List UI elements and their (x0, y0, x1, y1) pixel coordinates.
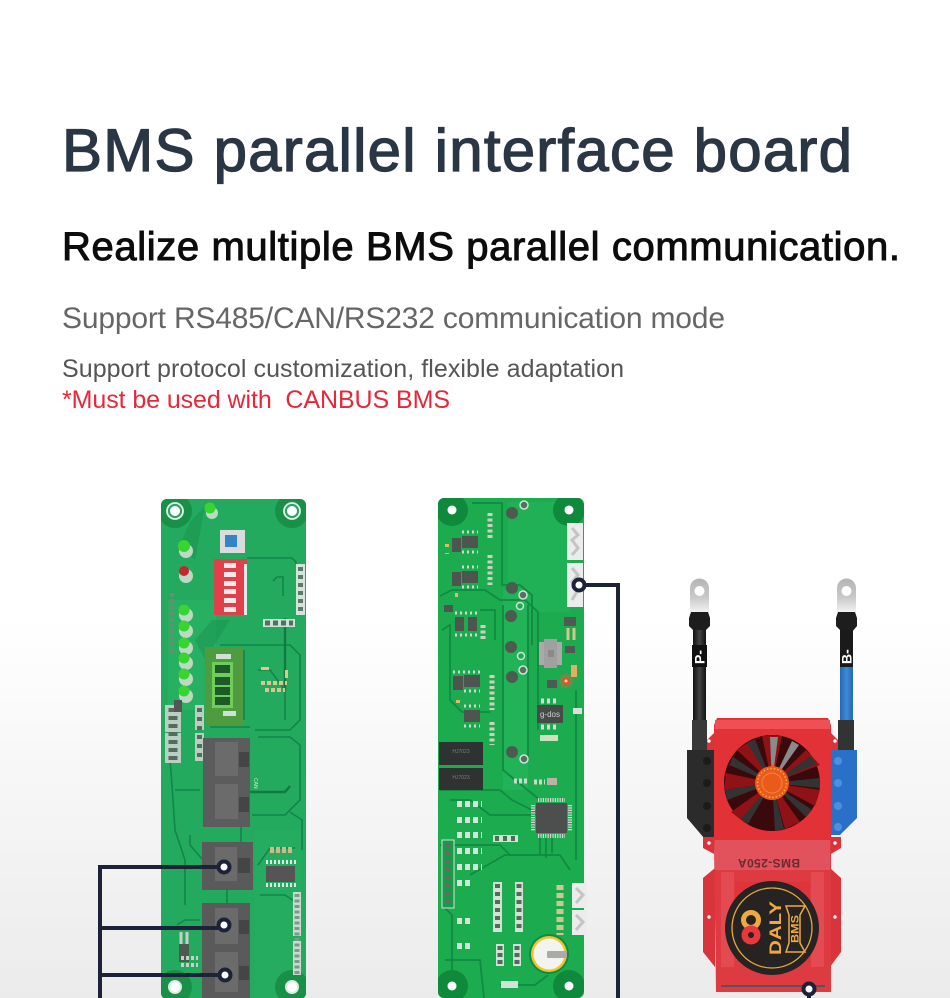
SOIC chip (266, 850, 296, 885)
power MOSFET chip: g-dos (540, 710, 560, 719)
microcontroller chip (512, 778, 570, 836)
DALY logo badge: DALY (766, 900, 785, 955)
connector nodes on RJ45 ports (218, 862, 230, 980)
traces (170, 558, 302, 935)
icon: coin cell battery (529, 934, 569, 974)
icon: mounting holes (436, 494, 585, 998)
vias and standoffs (505, 501, 528, 763)
relay bottom: HJ7023 (452, 775, 470, 781)
DALY logo badge: BMS (790, 915, 802, 943)
white connector: main port (567, 563, 583, 607)
traces (440, 503, 576, 998)
terminal block: blue (831, 750, 857, 835)
side pin strip (442, 804, 482, 946)
icon: mounting holes (158, 494, 309, 998)
relay top (439, 742, 483, 765)
wiring: right line from main port (574, 580, 618, 998)
white connectors: NTC (572, 883, 587, 935)
wiring: BMS node (804, 984, 814, 998)
white connector: LCD port (567, 523, 583, 560)
wiring: left bus from connectors (100, 867, 218, 998)
label: CAN: CAN (252, 778, 258, 789)
icon: red indicator LED (559, 674, 573, 688)
right PCB board, component side (436, 494, 585, 998)
terminal block: black (687, 750, 714, 838)
feature line: protocol customization: Support protocol customization, flexible adaptation (62, 355, 624, 383)
BMS protection board (687, 578, 857, 992)
lower housing (714, 840, 831, 992)
label: model name: BMS-250A (738, 856, 800, 870)
DALY logo badge (725, 881, 819, 975)
power MOSFET chip (537, 701, 582, 741)
red upper housing (714, 718, 831, 840)
relay bottom (439, 768, 483, 790)
small components (178, 667, 288, 712)
small resistors near NTC (556, 885, 564, 935)
icon: status LEDs (178, 502, 218, 703)
icon: green terminal connector (205, 647, 243, 725)
RJ45 RS485 double connector (202, 903, 250, 998)
pin holes column (170, 593, 174, 654)
warning note: *Must be used with CANBUS BMS (62, 386, 450, 414)
left PCB board, connector side (158, 494, 309, 998)
pin headers (493, 835, 523, 988)
cable: B- with ring lug: B- (838, 649, 854, 664)
inductor (539, 639, 562, 668)
left column of ICs (444, 513, 492, 745)
cable: P- with ring lug: P- (692, 650, 708, 664)
cable: P- with ring lug (689, 578, 710, 752)
feature line: communication modes: Support RS485/CAN/RS232 communication mode (62, 302, 725, 335)
RJ45 RS232 connector (202, 842, 253, 890)
right header strip (179, 892, 301, 975)
icon: red DIP switch (214, 559, 247, 615)
pin headers (165, 564, 305, 763)
subtitle: Realize multiple BMS parallel communication. (62, 225, 900, 269)
ears and side flanges (703, 733, 841, 967)
icon: cooling fan (724, 735, 820, 831)
title: BMS parallel interface board (62, 117, 852, 184)
icon: reset push button (220, 530, 245, 553)
RJ45 CAN double connector (203, 738, 250, 827)
power section parts (547, 617, 577, 688)
LED shadows (182, 507, 204, 560)
cable: B- with ring lug (836, 578, 857, 752)
relay top: HJ7023 (452, 749, 470, 755)
